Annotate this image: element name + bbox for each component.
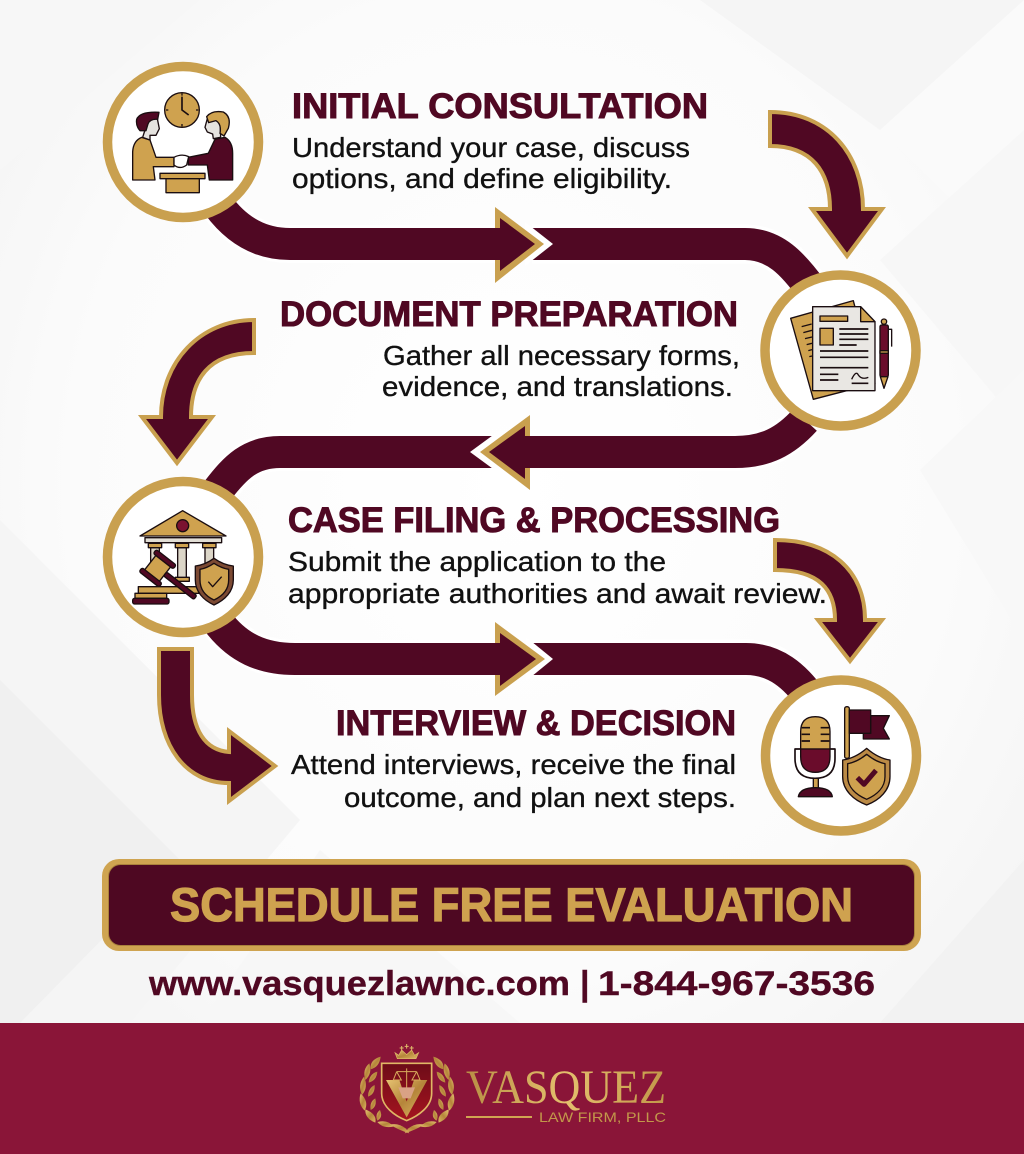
text: step 3 description [288, 546, 827, 609]
arrow: curved right to interview text [159, 649, 275, 801]
connector band 3 [218, 622, 812, 700]
contact details: | [580, 965, 590, 1003]
text: step 4 description: Attend interviews, receive the final [291, 749, 736, 780]
logo tagline: LAW FIRM, PLLC [539, 1109, 666, 1125]
arrow: curved down to filing step [142, 320, 254, 463]
laurel left [360, 1057, 409, 1133]
heading: interview and decision: INTERVIEW & DECISION [336, 704, 736, 743]
logo crest [360, 1044, 454, 1133]
heading: initial consultation: INITIAL CONSULTATION [292, 87, 708, 126]
icon: courthouse, gavel and shield [133, 511, 233, 609]
text: step 2 description [382, 340, 740, 402]
contact details: 1-844-967-3536 [598, 965, 875, 1003]
logo: Vasquez Law Firm [360, 1044, 666, 1133]
icon: handshake with clock [133, 93, 233, 193]
text: step 4 description: outcome, and plan next steps. [344, 782, 736, 813]
heading: case filing and processing: CASE FILING & PROCESSING [288, 501, 780, 540]
step 3 medallion [108, 482, 258, 632]
arrow: curved down to interview step [775, 540, 882, 661]
arrow: curved down to document step [770, 112, 882, 256]
contact details: www.vasquezlawnc.com [148, 965, 570, 1003]
step 1 medallion [108, 66, 258, 218]
call to action label: SCHEDULE FREE EVALUATION [170, 878, 853, 931]
icon: documents and pen [791, 301, 892, 399]
step 4 medallion [766, 680, 916, 831]
call to action banner [102, 859, 921, 951]
step 2 medallion [765, 275, 916, 426]
icon: microphone, flag and shield [795, 707, 890, 805]
footer band [0, 1023, 1024, 1154]
text: step 1 description: Understand your case, discuss [292, 132, 690, 163]
connector band 1 [218, 205, 812, 290]
text: step 3 description: Submit the application to the [288, 546, 666, 577]
contact details [148, 965, 875, 1003]
text: step 1 description: options, and define eligibility. [292, 163, 672, 194]
laurel right [405, 1057, 454, 1133]
text: step 2 description: evidence, and translations. [382, 371, 733, 402]
text: step 2 description: Gather all necessary forms, [383, 340, 740, 371]
text: step 4 description [291, 749, 736, 813]
text: step 3 description: appropriate authorities and await review. [288, 578, 827, 609]
logo rule [466, 1116, 532, 1118]
text: step 1 description [292, 132, 690, 194]
heading: document preparation: DOCUMENT PREPARATION [280, 295, 738, 334]
connector band 2 [218, 415, 805, 490]
logo wordmark: VASQUEZ [466, 1061, 666, 1114]
